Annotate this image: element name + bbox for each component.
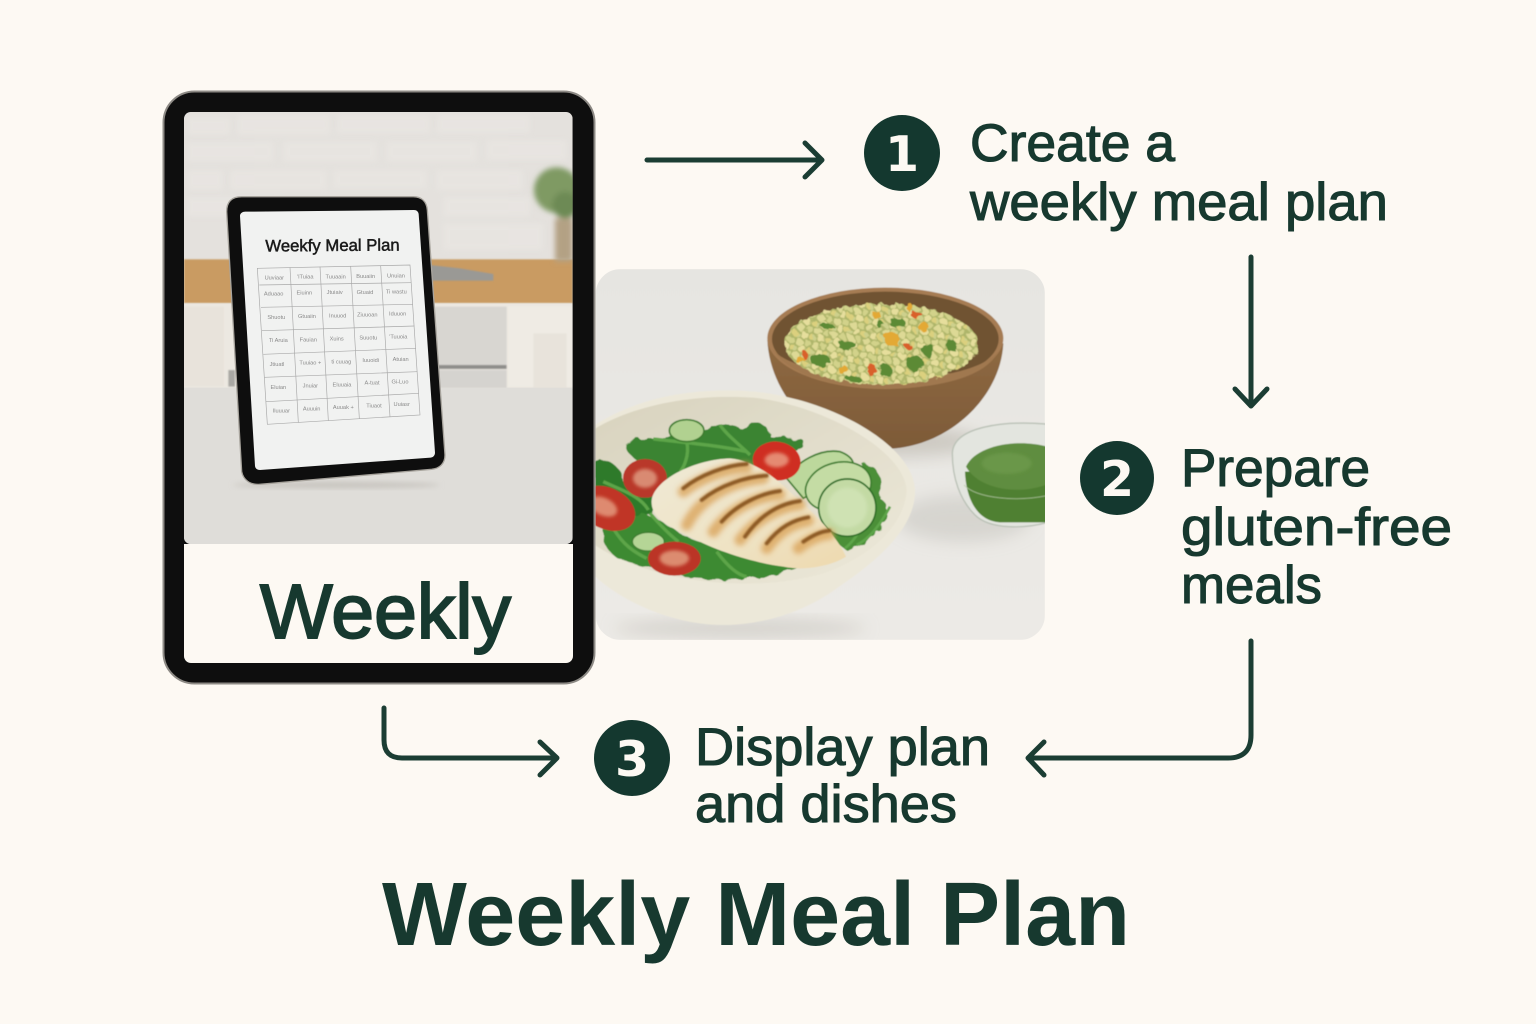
kitchen counter — [184, 259, 573, 303]
meal plan grid: Suuotu — [359, 336, 377, 342]
step 3 text: Display plan — [695, 718, 990, 777]
meal plan grid: Jnuiar — [303, 384, 318, 390]
grain salad — [785, 304, 978, 385]
arrow: step 1 to step 2 — [1235, 257, 1267, 406]
step 3 text — [695, 718, 990, 834]
meal plan grid: Eluuaia — [333, 382, 352, 388]
icon: brown bowl with grain salad — [767, 288, 1003, 449]
meal plan grid: Uuviaar — [265, 275, 284, 281]
step 2 — [1080, 439, 1452, 615]
meal plan grid: Eiuinn — [296, 291, 312, 297]
meal plan grid: Gi-Luo — [392, 379, 408, 385]
meal plan grid: Gtuaid — [357, 290, 373, 296]
small tablet with meal plan — [227, 197, 445, 484]
arrow: step 2 to step 3 — [1028, 641, 1251, 775]
potted plant — [534, 167, 579, 262]
step 2 badge — [1080, 441, 1154, 515]
meal plan grid: Shuotu — [267, 315, 285, 321]
step 3 badge — [594, 720, 670, 796]
step 2 text: Prepare — [1181, 439, 1370, 498]
meal plan grid: Ti Aruia — [269, 338, 289, 344]
meal plan grid: Tuuaain — [326, 275, 346, 281]
meal plan grid: 'lTuiaa — [297, 275, 314, 281]
arrow: tablet to step 1 — [647, 143, 822, 177]
step 3 text: and dishes — [695, 775, 957, 834]
cucumber slices — [632, 420, 877, 551]
meal plan grid: Auuuin — [303, 407, 320, 413]
meal plan grid: Gtuaiin — [298, 314, 316, 320]
meal plan grid: Inuuod — [329, 313, 346, 319]
meal plan grid: Xuins — [330, 336, 344, 342]
step 1 badge: 1 — [885, 126, 919, 183]
step 3 — [594, 718, 990, 834]
meal plan grid: Auuak + — [333, 405, 354, 411]
meal plan grid: Fauian — [300, 337, 317, 343]
meal plan grid: Buuaiin — [356, 274, 375, 280]
panel: large tablet — [164, 92, 594, 684]
tablet screen photo — [184, 112, 579, 544]
step 1 text — [969, 114, 1388, 232]
icon: glass bowl with green sauce — [952, 423, 1050, 527]
meal plan grid: Iluuuar — [273, 408, 290, 414]
meal plan grid: Jtuiaiv — [327, 290, 343, 296]
title: Weekly Meal Plan — [382, 865, 1130, 965]
arrow: tablet to step 3 — [384, 708, 557, 775]
step 1 — [864, 114, 1388, 232]
step 2 badge: 2 — [1100, 451, 1134, 508]
salad greens — [596, 424, 886, 579]
meal plan grid: Tiuaot — [366, 403, 382, 409]
tablet caption: Weekly: Weekly — [260, 569, 511, 655]
step 1 text: Create a — [970, 114, 1176, 173]
brick wall — [187, 115, 567, 250]
cherry tomatoes — [571, 439, 803, 576]
meal plan grid: Iuuoidi — [362, 358, 379, 364]
step 1 text: weekly meal plan — [969, 173, 1388, 232]
step 2 text: gluten-free — [1181, 498, 1452, 557]
meal plan grid: A-tuat — [364, 381, 380, 387]
panel: food photo — [571, 269, 1050, 640]
meal plan grid: Atuian — [393, 357, 409, 363]
meal plan grid: Uuiasr — [393, 402, 410, 408]
meal plan grid: Tuuiao + — [299, 361, 322, 367]
meal plan grid: Eluian — [270, 385, 286, 391]
meal plan grid: Iduuon — [389, 312, 406, 318]
small tablet title: Weekfy Meal Plan — [265, 236, 400, 255]
meal plan grid: Jtiuatl — [270, 362, 284, 368]
tablet caption area — [184, 544, 573, 663]
icon: salad bowl with grilled chicken — [571, 391, 915, 625]
meal plan grid — [257, 265, 420, 424]
step 1 badge — [864, 115, 940, 191]
meal plan grid: Ziuuoan — [357, 313, 378, 319]
meal plan grid: Aduaao — [264, 291, 283, 297]
meal plan grid: Unuian — [387, 273, 405, 279]
step 2 text — [1181, 439, 1452, 615]
grilled chicken breast — [652, 458, 846, 568]
kitchen cabinets — [184, 303, 573, 388]
laptop on counter — [430, 265, 493, 281]
meal plan grid: 'Tuuoia — [389, 334, 408, 340]
meal plan grid: Ti wastu — [386, 289, 407, 295]
step 3 badge: 3 — [615, 731, 649, 788]
meal plan grid: ti cuuag — [331, 360, 351, 366]
step 2 text: meals — [1181, 556, 1322, 615]
table surface — [184, 388, 573, 544]
